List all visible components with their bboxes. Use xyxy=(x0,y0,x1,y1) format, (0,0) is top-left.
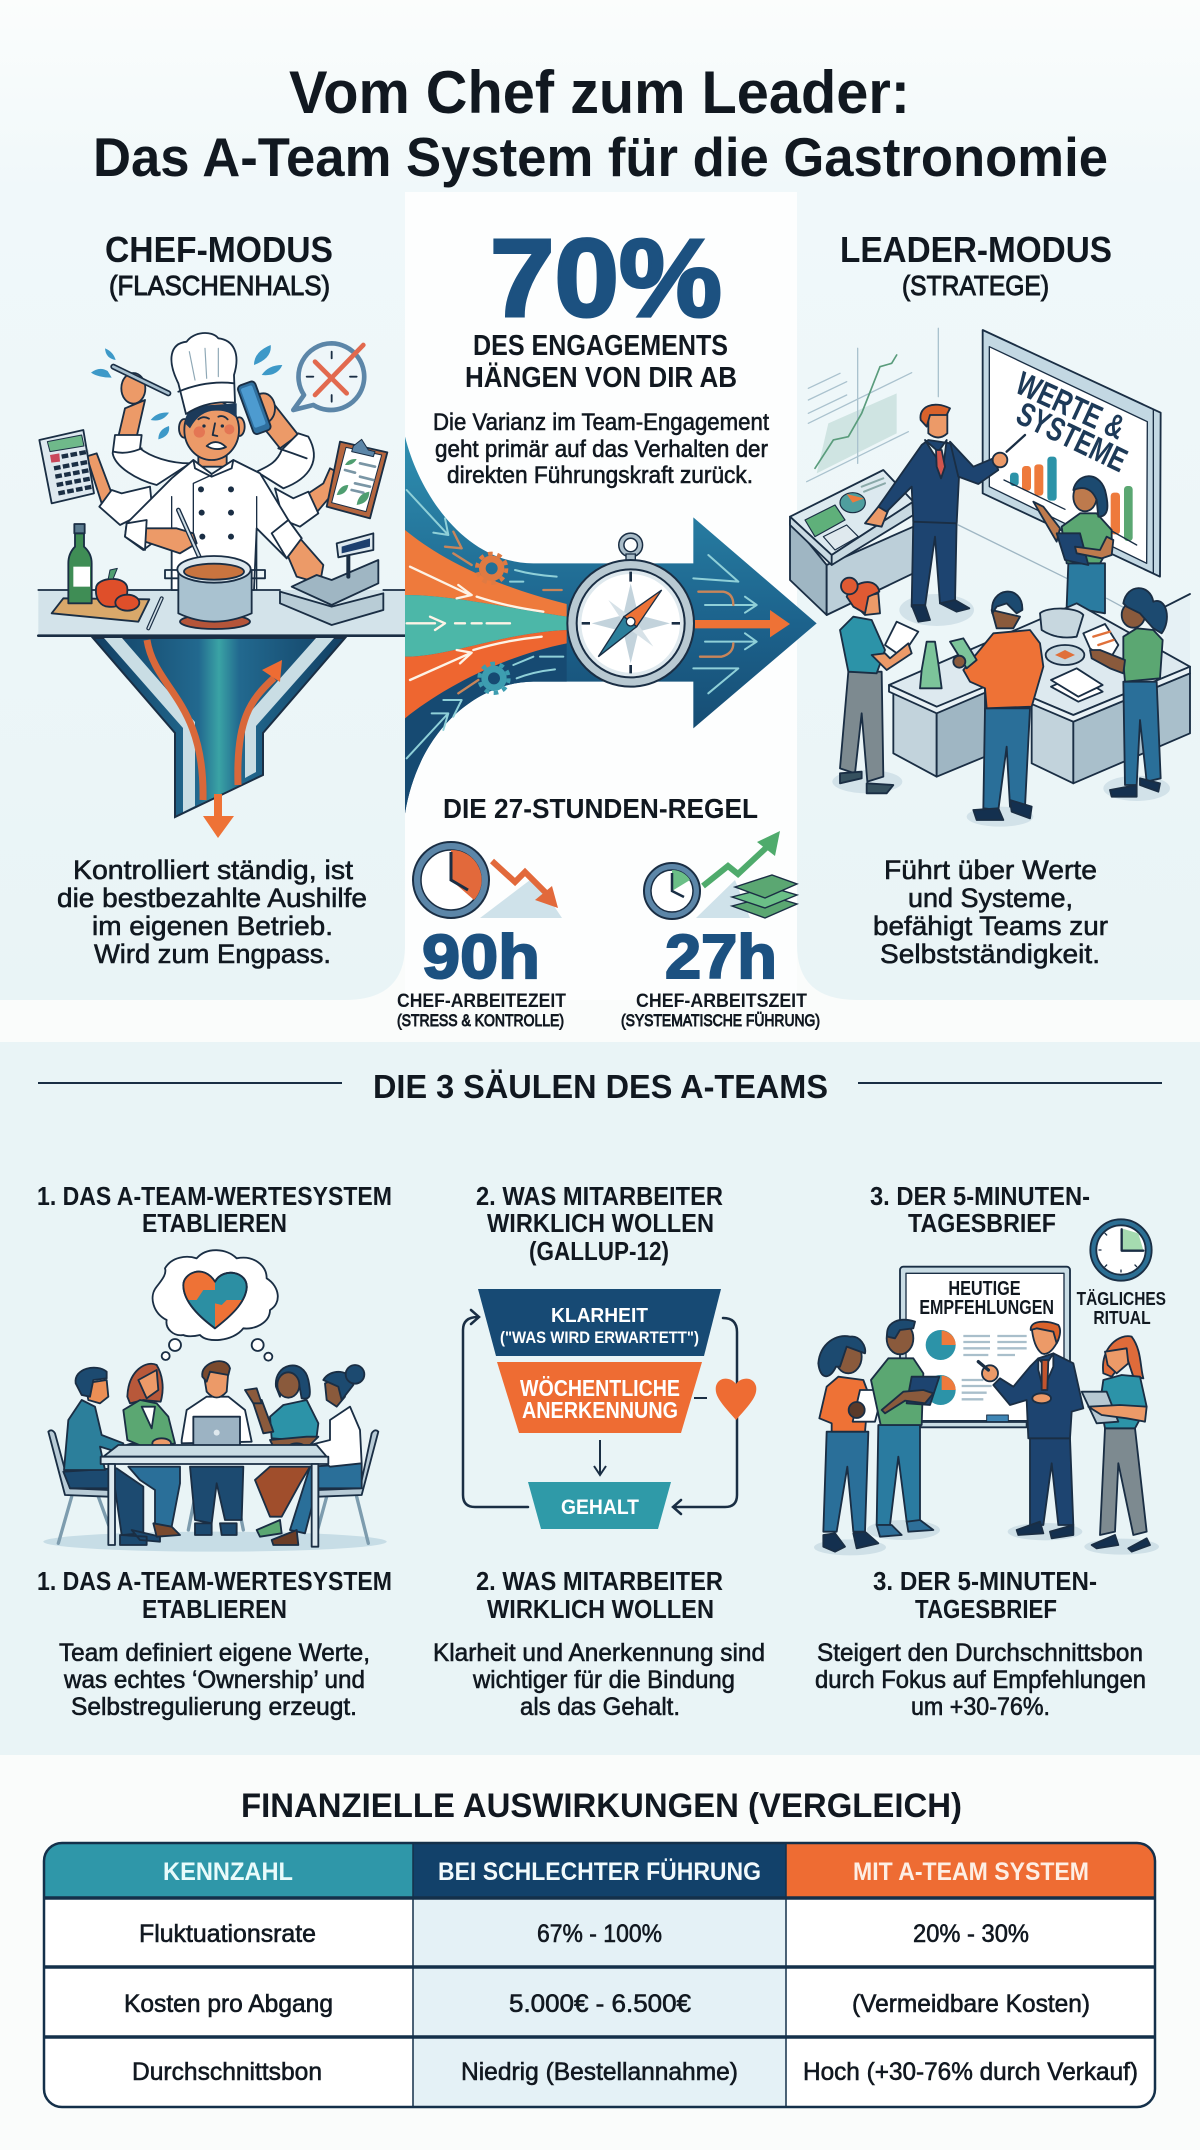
icon: orange gear xyxy=(477,554,506,583)
heading: pillar 3: TAGESBRIEF xyxy=(908,1208,1056,1238)
arrow: left feedback loop xyxy=(463,1310,528,1507)
heading: 27 hour rule: DIE 27-STUNDEN-REGEL xyxy=(443,793,758,824)
whiteboard: HEUTIGE xyxy=(948,1278,1021,1300)
text block: pillar 1: Team definiert eigene Werte, xyxy=(59,1639,370,1667)
woman at board xyxy=(1033,476,1113,613)
text block: pillar 3: durch Fokus auf Empfehlungen xyxy=(815,1666,1146,1694)
text: chef description: die bestbezahlte Aushilfe xyxy=(57,883,367,913)
stat: 27 hours: CHEF-ARBEITSZEIT xyxy=(636,991,807,1012)
text: chef description xyxy=(57,855,367,969)
stat: 27 hours: 27h xyxy=(665,923,777,992)
row: cost per departure: Kosten pro Abgang xyxy=(124,1990,333,2018)
left desk xyxy=(790,470,913,615)
stat: 70 percent xyxy=(465,217,737,394)
icon: thought cloud with puzzle heart xyxy=(153,1250,278,1361)
icon: heart xyxy=(694,1379,756,1420)
phone xyxy=(237,380,275,435)
text: leader description: befähigt Teams zur xyxy=(873,911,1108,941)
person 1 xyxy=(814,1336,886,1555)
whiteboard: EMPFEHLUNGEN xyxy=(919,1297,1054,1319)
side arms xyxy=(80,453,112,503)
heading: pillar 2 xyxy=(476,1181,723,1266)
heading: leader mode xyxy=(840,229,1112,301)
arrow: transformation with compass xyxy=(405,437,817,813)
icon: clock speech bubble with cross xyxy=(293,343,364,410)
heading: three pillars: DIE 3 SÄULEN DES A-TEAMS xyxy=(373,1068,828,1105)
heading: chef mode: CHEF-MODUS xyxy=(105,229,333,270)
text: leader description: Selbstständigkeit. xyxy=(880,939,1100,969)
text block: pillar 2: 2. WAS MITARBEITER xyxy=(476,1566,723,1596)
row: average check: Durchschnittsbon xyxy=(132,2058,322,2086)
person 1 xyxy=(63,1368,160,1545)
text: variance explanation xyxy=(433,409,769,489)
spoon xyxy=(113,367,168,393)
person 3 xyxy=(978,1322,1083,1540)
wall board: SYSTEME xyxy=(1011,396,1133,480)
row: average check: Niedrig (Bestellannahme) xyxy=(461,2058,738,2086)
text: chef description: Kontrolliert ständig, ist xyxy=(73,855,354,885)
icon: clipboard xyxy=(327,439,387,518)
row: turnover: Fluktuationsrate xyxy=(139,1920,316,1948)
text: variance explanation: direkten Führungskraft zurück. xyxy=(447,462,753,489)
bottle, tomato and board xyxy=(52,524,162,628)
raised arms xyxy=(118,400,145,437)
person 5 xyxy=(272,1365,364,1545)
text block: pillar 2 xyxy=(433,1566,765,1721)
person 2 xyxy=(867,1320,940,1540)
text block: pillar 1: ETABLIEREN xyxy=(142,1594,287,1624)
text: leader description: Führt über Werte xyxy=(884,855,1097,885)
row: turnover: 67% - 100% xyxy=(537,1920,662,1948)
title xyxy=(93,59,1108,188)
funnel tier: clarity xyxy=(478,1289,721,1356)
team member left xyxy=(832,578,918,793)
text block: pillar 3: Steigert den Durchschnittsbon xyxy=(817,1639,1143,1667)
stat: 90 hours xyxy=(397,923,566,1030)
stat: 70 percent: DES ENGAGEMENTS xyxy=(473,330,728,362)
text: chef description: Wird zum Engpass. xyxy=(94,939,331,969)
funnel tier: recognition: WÖCHENTLICHE xyxy=(520,1375,680,1401)
heading: pillar 1 xyxy=(37,1181,392,1238)
text block: pillar 1 xyxy=(37,1566,392,1721)
chef coat xyxy=(125,460,323,590)
heading: financial impact: FINANZIELLE AUSWIRKUNGEN (VERGLEICH) xyxy=(241,1787,962,1825)
team member center xyxy=(950,592,1043,827)
icon: stress clock with falling arrow xyxy=(413,842,562,918)
heading: leader mode: (STRATEGE) xyxy=(902,270,1049,301)
label: daily ritual xyxy=(1077,1288,1166,1328)
pot xyxy=(165,556,265,629)
chef head xyxy=(179,400,245,467)
text block: pillar 1: was echtes ‘Ownership’ und xyxy=(63,1666,365,1694)
row: turnover xyxy=(139,1920,1029,1948)
arrow: down to salary xyxy=(594,1440,606,1475)
illustration: daily briefing at whiteboard xyxy=(814,1219,1166,1555)
text block: pillar 2: Klarheit und Anerkennung sind xyxy=(433,1639,765,1667)
heading: chef mode: (FLASCHENHALS) xyxy=(109,270,330,301)
title: Vom Chef zum Leader: xyxy=(289,59,910,126)
text block: pillar 3: 3. DER 5-MINUTEN- xyxy=(873,1566,1097,1596)
table: financial comparison xyxy=(44,1843,1155,2107)
panel: center column background xyxy=(405,192,797,1000)
background chart xyxy=(807,328,938,482)
funnel tier: recognition: ANERKENNUNG xyxy=(522,1397,678,1423)
table header: MIT A-TEAM SYSTEM xyxy=(853,1858,1089,1886)
text block: pillar 3: TAGESBRIEF xyxy=(915,1594,1057,1624)
funnel tier: salary: GEHALT xyxy=(561,1496,639,1519)
heading: pillar 3 xyxy=(870,1181,1090,1238)
heading: leader mode: LEADER-MODUS xyxy=(840,229,1112,270)
label: daily ritual: RITUAL xyxy=(1093,1307,1151,1328)
wall board: WERTE & xyxy=(1010,365,1131,447)
row: average check: Hoch (+30-76% durch Verkauf) xyxy=(803,2058,1138,2086)
text block: pillar 2: WIRKLICH WOLLEN xyxy=(487,1594,714,1624)
arrow: orange output xyxy=(695,610,790,637)
wall board xyxy=(983,330,1161,577)
heading: pillar 1: ETABLIEREN xyxy=(142,1208,287,1238)
heading: chef mode xyxy=(105,229,333,301)
leader figure xyxy=(865,405,1025,622)
icon: teal gear xyxy=(479,664,509,693)
icon: compass xyxy=(567,536,694,687)
person 4 xyxy=(245,1365,318,1537)
stat: 70 percent: 70% xyxy=(490,217,722,340)
text block: pillar 1: Selbstregulierung erzeugt. xyxy=(71,1693,357,1721)
heading: pillar 3: 3. DER 5-MINUTEN- xyxy=(870,1181,1090,1211)
row: cost per departure: 5.000€ - 6.500€ xyxy=(509,1990,691,2018)
text block: pillar 2: als das Gehalt. xyxy=(520,1693,680,1721)
chef hat xyxy=(171,333,236,414)
text: variance explanation: Die Varianz im Team-Engagement xyxy=(433,409,769,436)
panel: pillars background xyxy=(0,1042,1200,1755)
center table xyxy=(889,594,1190,783)
cash register xyxy=(280,533,383,625)
stat: 27 hours xyxy=(621,923,820,1030)
funnel tier: clarity: ("WAS WIRD ERWARTETT") xyxy=(500,1328,699,1347)
stat: 90 hours: (STRESS & KONTROLLE) xyxy=(397,1011,564,1030)
whiteboard xyxy=(900,1267,1070,1427)
icon: clock xyxy=(1090,1219,1152,1281)
panel: chef mode background xyxy=(0,190,405,1000)
chairs xyxy=(48,1430,378,1543)
diagram: employee priorities funnel xyxy=(463,1289,756,1529)
text: leader description: und Systeme, xyxy=(908,883,1073,913)
funnel tier: salary xyxy=(528,1482,671,1529)
label: daily ritual: TÄGLICHES xyxy=(1077,1288,1166,1309)
stat: 70 percent: HÄNGEN VON DIR AB xyxy=(465,361,737,394)
illustration: bottleneck funnel xyxy=(93,638,345,838)
text block: pillar 3 xyxy=(815,1566,1146,1721)
stat: 90 hours: 90h xyxy=(422,923,540,992)
stat: 90 hours: CHEF-ARBEITEZEIT xyxy=(397,991,566,1012)
table header: BEI SCHLECHTER FÜHRUNG xyxy=(438,1857,761,1886)
text block: pillar 3: um +30-76%. xyxy=(911,1693,1050,1721)
table xyxy=(101,1445,328,1547)
icon: sweat drops xyxy=(91,345,282,439)
row: average check xyxy=(132,2058,1138,2086)
text block: pillar 1: 1. DAS A-TEAM-WERTESYSTEM xyxy=(37,1566,392,1596)
team member right xyxy=(1090,588,1170,801)
text: leader description xyxy=(873,855,1108,969)
row: turnover: 20% - 30% xyxy=(913,1920,1029,1948)
icon: calm clock with rising arrow and money xyxy=(644,831,797,919)
heading: pillar 2: (GALLUP-12) xyxy=(529,1236,669,1266)
table header: KENNZAHL xyxy=(163,1858,293,1886)
funnel tier: recognition xyxy=(497,1362,702,1433)
row: cost per departure: (Vermeidbare Kosten) xyxy=(852,1990,1090,2018)
stat: 27 hours: (SYSTEMATISCHE FÜHRUNG) xyxy=(621,1011,820,1030)
text block: pillar 2: wichtiger für die Bindung xyxy=(472,1666,735,1694)
title: Das A-Team System für die Gastronomie xyxy=(93,126,1108,188)
counter xyxy=(38,590,405,635)
funnel tier: clarity: KLARHEIT xyxy=(551,1305,648,1327)
text: variance explanation: geht primär auf das Verhalten der xyxy=(435,436,768,463)
arrow: out of funnel xyxy=(203,794,234,838)
person 4 xyxy=(1082,1336,1159,1555)
heading: pillar 2: WIRKLICH WOLLEN xyxy=(487,1208,714,1238)
heading: pillar 1: 1. DAS A-TEAM-WERTESYSTEM xyxy=(37,1181,392,1211)
table header xyxy=(44,1843,1155,1898)
text: chef description: im eigenen Betrieb. xyxy=(92,911,333,941)
heading: pillar 2: 2. WAS MITARBEITER xyxy=(476,1181,723,1211)
person 2 xyxy=(123,1364,180,1537)
arrow: right feedback loop xyxy=(673,1318,737,1514)
illustration: leader with team xyxy=(790,328,1190,827)
illustration: team at table with shared values xyxy=(43,1250,387,1552)
icon: calculator xyxy=(39,430,94,503)
row: cost per departure xyxy=(124,1990,1090,2018)
person 3 xyxy=(182,1361,252,1535)
illustration: stressed chef at counter xyxy=(38,333,405,636)
panel: leader mode background xyxy=(797,190,1200,1000)
